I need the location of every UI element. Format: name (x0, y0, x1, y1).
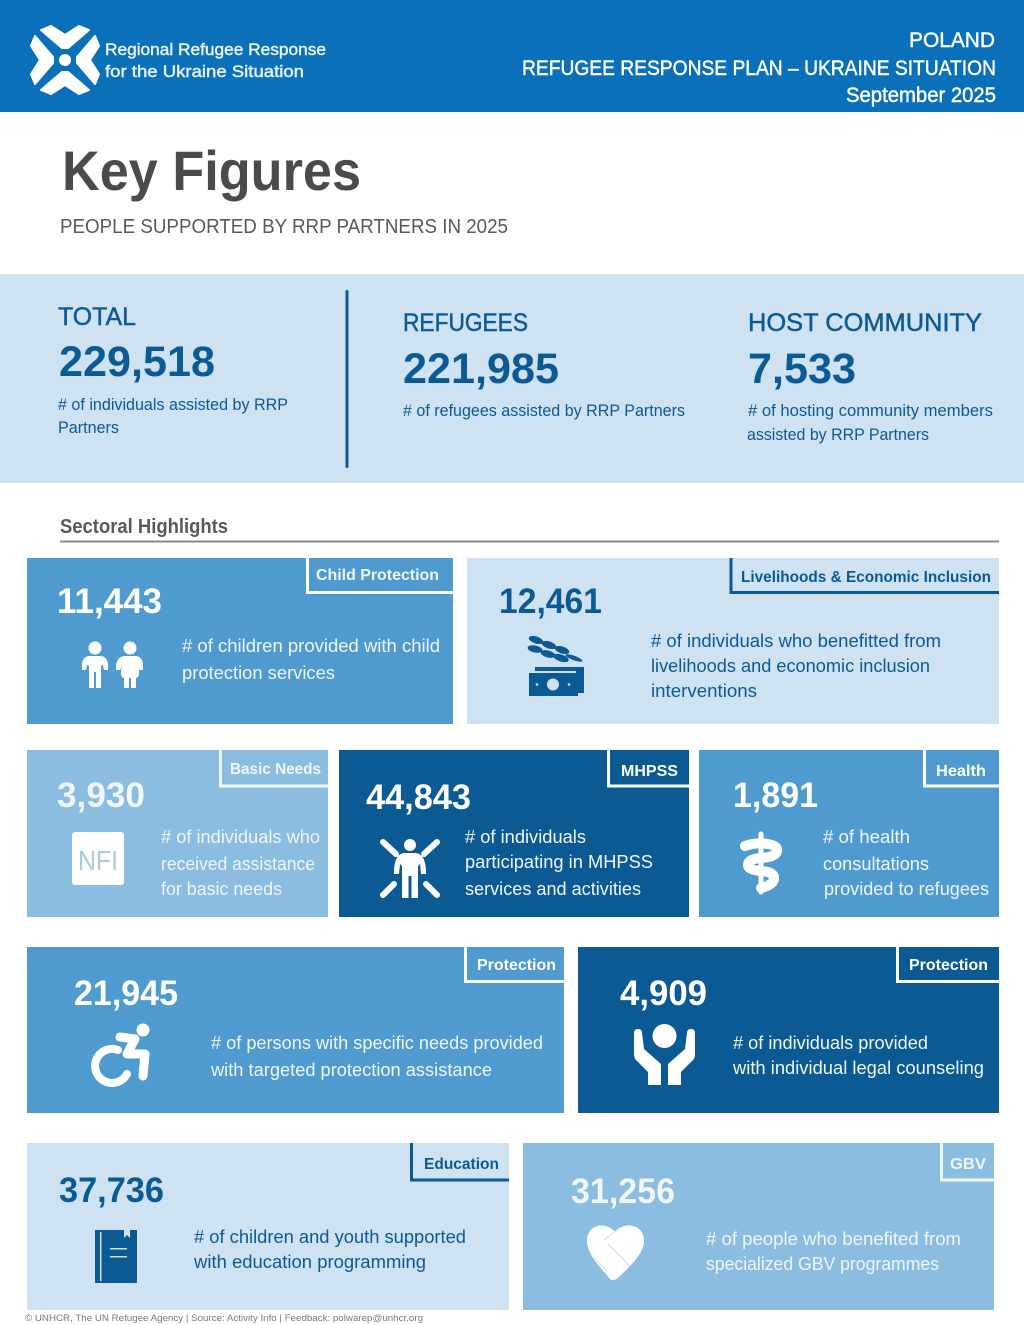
panel: livelihoods: Livelihoods & Economic Inclusion (741, 569, 991, 586)
panel: basic needs: Basic Needs (230, 761, 321, 778)
icon: wheelchair user (95, 1024, 150, 1083)
host community figure: 7,533 (748, 345, 856, 393)
title: Key Figures (62, 139, 361, 202)
icon: rod of asclepius (745, 834, 777, 892)
panel: health (699, 750, 999, 917)
panel: GBV: GBV (950, 1156, 986, 1173)
icon: NFI box: NFI (78, 845, 118, 876)
panel: education: with education programming (193, 1252, 426, 1272)
panel: MHPSS (339, 750, 689, 917)
total figure: 229,518 (59, 338, 215, 386)
panel: protection, legal counseling: # of individuals provided (733, 1033, 928, 1053)
panel: MHPSS: 44,843 (366, 778, 471, 817)
panel: health: consultations (823, 854, 929, 874)
icon: grain and banknotes (527, 634, 584, 696)
panel: education: 37,736 (59, 1171, 164, 1210)
total figure: # of individuals assisted by RRP (58, 395, 288, 414)
panel: basic needs: for basic needs (161, 879, 282, 899)
panel: health: provided to refugees (824, 879, 989, 899)
panel: GBV: 31,256 (571, 1172, 675, 1211)
logo text: Regional Refugee Response (105, 40, 326, 59)
panel: health: 1,891 (733, 776, 818, 815)
panel: education (27, 1143, 509, 1310)
panel: livelihoods: livelihoods and economic inclusion (651, 656, 930, 676)
panel: livelihoods: interventions (651, 681, 757, 701)
panel: protection, specific needs: with targeted protection assistance (210, 1060, 492, 1080)
header banner (0, 0, 1024, 112)
logo text: for the Ukraine Situation (105, 62, 304, 81)
panel: health: Health (936, 763, 986, 780)
host community figure: # of hosting community members (748, 401, 993, 420)
panel: GBV: specialized GBV programmes (706, 1254, 939, 1274)
icon: regional response logo (31, 26, 99, 94)
panel: livelihoods: # of individuals who benefitted from (651, 631, 941, 651)
total figure: Partners (58, 418, 119, 437)
total figure: TOTAL (58, 303, 136, 331)
icon: NFI box (72, 832, 124, 885)
refugees figure: 221,985 (403, 345, 559, 393)
refugees figure (403, 309, 685, 420)
panel: protection, legal counseling: 4,909 (620, 974, 707, 1013)
panel: child protection: protection services (182, 663, 335, 683)
panel: protection, specific needs (27, 947, 564, 1113)
icon: book (95, 1230, 137, 1283)
panel: protection, legal counseling (578, 947, 999, 1113)
report title (522, 29, 996, 107)
refugees figure: REFUGEES (403, 309, 528, 337)
panel: child protection: Child Protection (316, 567, 439, 584)
panel: protection, specific needs: # of persons with specific needs provided (211, 1033, 543, 1053)
panel: livelihoods: 12,461 (499, 582, 602, 621)
panel: basic needs: 3,930 (57, 776, 145, 815)
icon: hands holding person (634, 1024, 695, 1085)
refugees figure: # of refugees assisted by RRP Partners (403, 401, 685, 420)
panel: GBV: # of people who benefited from (706, 1229, 961, 1249)
footer: © UNHCR, The UN Refugee Agency | Source: Activity Info | Feedback: polwarep@unhcr.org (25, 1313, 423, 1324)
host community figure: HOST COMMUNITY (748, 309, 982, 337)
panel: protection, legal counseling: Protection (909, 957, 988, 974)
panel: child protection: 11,443 (57, 582, 162, 621)
host community figure: assisted by RRP Partners (747, 425, 929, 444)
panel: education: Education (424, 1156, 499, 1173)
panel: totals band (0, 274, 1024, 483)
icon: handshake heart (587, 1226, 644, 1280)
panel: child protection: # of children provided with child (182, 636, 440, 656)
total figure (58, 303, 288, 437)
panel: protection, specific needs: Protection (477, 957, 556, 974)
panel: protection, specific needs: 21,945 (74, 974, 178, 1013)
heading: sectoral highlights: Sectoral Highlights (60, 516, 228, 538)
panel: MHPSS: MHPSS (621, 763, 678, 780)
panel: MHPSS: participating in MHPSS (465, 852, 653, 872)
panel: MHPSS: # of individuals (465, 827, 586, 847)
panel: basic needs (27, 750, 328, 917)
panel: MHPSS: services and activities (465, 879, 641, 899)
icon: person with radiating bars (383, 839, 437, 898)
logo text (105, 40, 326, 81)
panel: livelihoods (467, 558, 999, 724)
panel: education: # of children and youth supported (194, 1227, 466, 1247)
panel: health: # of health (823, 827, 910, 847)
panel: child protection (27, 558, 453, 724)
panel: GBV (523, 1143, 994, 1310)
panel: basic needs: # of individuals who (161, 827, 320, 847)
panel: basic needs: received assistance (161, 854, 315, 874)
icon: children (82, 642, 143, 688)
subtitle: PEOPLE SUPPORTED BY RRP PARTNERS IN 2025 (60, 216, 508, 238)
report title: POLAND (909, 29, 995, 52)
host community figure (747, 309, 993, 444)
report title: September 2025 (846, 84, 996, 107)
panel: protection, legal counseling: with individual legal counseling (732, 1058, 984, 1078)
